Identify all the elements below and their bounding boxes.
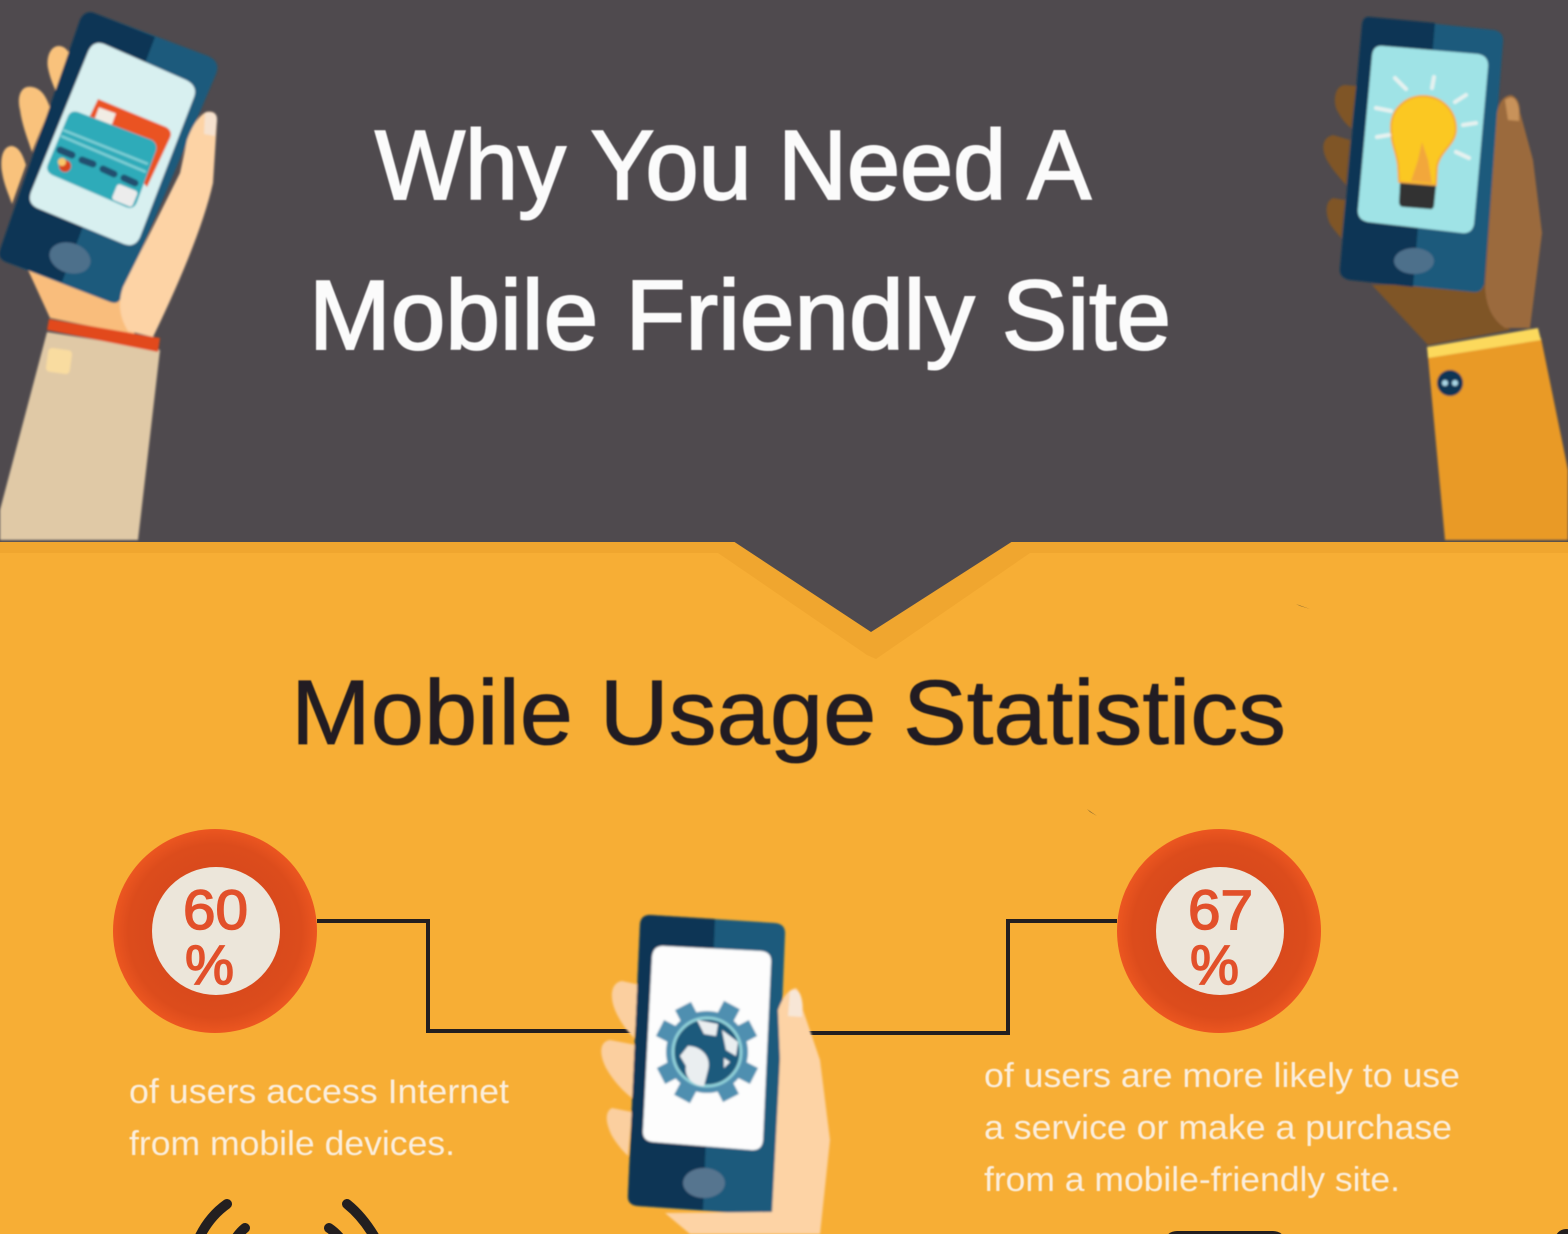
- right hand fingers: [1323, 85, 1356, 238]
- title: Why You Need A: [375, 110, 1092, 220]
- right palm: [1372, 285, 1510, 345]
- text: 67% description: from a mobile-friendly site.: [984, 1161, 1400, 1199]
- left sleeve: [0, 332, 160, 540]
- center thumb and palm: [665, 988, 830, 1234]
- right cuff band: [1427, 328, 1541, 358]
- stat: 60% badge: [113, 829, 317, 1033]
- right phone: [1340, 17, 1503, 292]
- icon: wifi signal arcs, left (cropped): [200, 1204, 374, 1234]
- right thumb: [1485, 95, 1542, 328]
- text: 60% description: of users access Internet: [129, 1073, 510, 1111]
- text: 67% description: [984, 1057, 1460, 1199]
- stat: 67% badge: %: [1190, 933, 1239, 996]
- panel: orange statistics section: [0, 541, 1568, 1234]
- stat: 67% badge: [1117, 829, 1321, 1033]
- center phone: [628, 915, 785, 1215]
- left phone: [0, 12, 217, 303]
- right sleeve button: [1437, 370, 1463, 396]
- text: 60% description: [129, 1073, 510, 1163]
- text: 60% description: from mobile devices.: [129, 1125, 455, 1163]
- heading: Mobile Usage Statistics: Mobile Usage Statistics: [291, 662, 1286, 764]
- left sleeve button: [45, 347, 73, 375]
- stat: 67% badge: 67: [1188, 878, 1253, 941]
- center hand fingers: [601, 981, 640, 1156]
- illustration: left hand holding phone with credit cards: [0, 12, 217, 540]
- text: 67% description: a service or make a purchase: [984, 1109, 1452, 1147]
- stat: 60% badge: %: [185, 933, 234, 996]
- text: 67% description: of users are more likely to use: [984, 1057, 1460, 1095]
- left hand fingers: [1, 46, 72, 204]
- title: [309, 110, 1171, 370]
- illustration: center hand holding phone with gear globe: [601, 915, 830, 1234]
- panel: dark header: [0, 0, 1568, 545]
- connector lines: [317, 921, 1117, 1033]
- gear globe icon: [660, 1005, 754, 1099]
- left cuff band: [47, 319, 160, 352]
- title: Mobile Friendly Site: [309, 260, 1171, 370]
- left palm: [28, 270, 135, 335]
- stat: 60% badge: 60: [183, 878, 248, 941]
- right sleeve: [1428, 338, 1568, 540]
- left thumb: [120, 112, 217, 337]
- illustration: right hand holding phone with light bulb: [1323, 17, 1568, 540]
- icon: cropped dark shapes at bottom right: [1165, 1229, 1568, 1234]
